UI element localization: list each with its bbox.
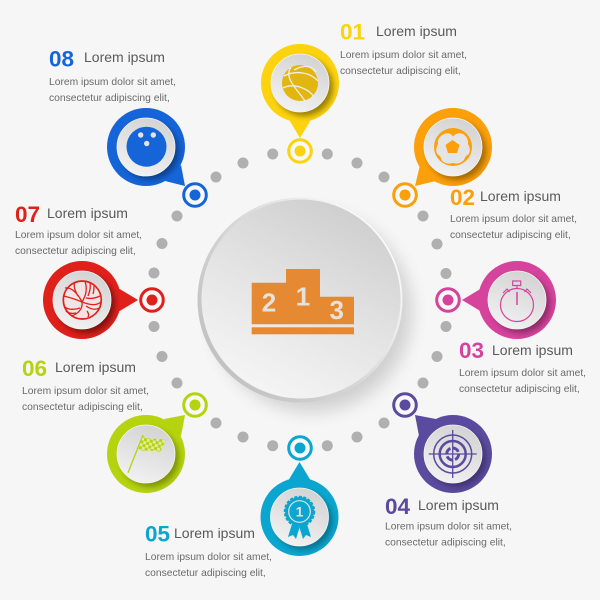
- number 03: 03: [459, 338, 484, 363]
- icon: podium: 2: [262, 288, 276, 318]
- step 07: [15, 202, 163, 339]
- title 08: Lorem ipsum: [84, 49, 165, 65]
- step 01: [261, 20, 467, 162]
- text 03: Lorem ipsum dolor sit amet,: [459, 368, 586, 379]
- text 03: consectetur adipiscing elit,: [459, 384, 580, 395]
- step 08: [49, 46, 206, 206]
- step 03: [437, 261, 586, 395]
- text 05: consectetur adipiscing elit,: [145, 568, 266, 579]
- icon: podium: 1: [296, 282, 310, 312]
- step 04: [385, 394, 512, 548]
- number 06: 06: [22, 356, 47, 381]
- pin 02: [394, 108, 492, 206]
- step 02: [394, 108, 577, 241]
- icon: checkered flag: [128, 435, 166, 473]
- text 01: consectetur adipiscing elit,: [340, 66, 461, 77]
- text 04: consectetur adipiscing elit,: [385, 538, 506, 548]
- text 02: Lorem ipsum dolor sit amet,: [450, 214, 577, 225]
- step 05: [145, 437, 338, 579]
- pin 05: [260, 437, 338, 556]
- icon: podium: [252, 269, 354, 334]
- icon: volleyball: [63, 281, 101, 319]
- text 07: Lorem ipsum dolor sit amet,: [15, 230, 142, 241]
- pin 03: [437, 261, 556, 339]
- icon: soccer ball: [434, 128, 472, 166]
- pin 04: [394, 394, 492, 493]
- text 06: Lorem ipsum dolor sit amet,: [22, 386, 149, 397]
- icon: medal: [285, 497, 314, 539]
- pin 07: [43, 261, 163, 339]
- number 07: 07: [15, 202, 40, 227]
- text 05: Lorem ipsum dolor sit amet,: [145, 552, 272, 563]
- text 08: Lorem ipsum dolor sit amet,: [49, 77, 176, 88]
- pin 06: [107, 394, 206, 493]
- title 03: Lorem ipsum: [492, 342, 573, 358]
- text 02: consectetur adipiscing elit,: [450, 230, 571, 241]
- icon: stopwatch: [500, 281, 534, 322]
- title 04: Lorem ipsum: [418, 497, 499, 513]
- number 02: 02: [450, 185, 475, 210]
- central disc with podium: [198, 198, 411, 411]
- pin 01: [261, 44, 339, 162]
- title 06: Lorem ipsum: [55, 359, 136, 375]
- dotted ring: [148, 148, 452, 451]
- text 08: consectetur adipiscing elit,: [49, 93, 170, 104]
- text 01: Lorem ipsum dolor sit amet,: [340, 50, 467, 61]
- title 02: Lorem ipsum: [480, 188, 561, 204]
- number 05: 05: [145, 522, 170, 546]
- text 06: consectetur adipiscing elit,: [22, 402, 143, 413]
- icon: medal: 1: [296, 504, 304, 520]
- icon: bowling ball: [126, 127, 166, 167]
- icon: podium: 3: [329, 295, 344, 325]
- icon: target: [429, 430, 477, 478]
- text 04: Lorem ipsum dolor sit amet,: [385, 522, 512, 532]
- text 07: consectetur adipiscing elit,: [15, 246, 136, 257]
- title 01: Lorem ipsum: [376, 23, 457, 39]
- step 06: [22, 356, 206, 493]
- title 05: Lorem ipsum: [174, 525, 255, 541]
- pin 08: [107, 108, 206, 206]
- number 04: 04: [385, 494, 411, 519]
- icon: basketball: [282, 65, 318, 101]
- number 01: 01: [340, 20, 365, 44]
- title 07: Lorem ipsum: [47, 205, 128, 221]
- number 08: 08: [49, 46, 74, 72]
